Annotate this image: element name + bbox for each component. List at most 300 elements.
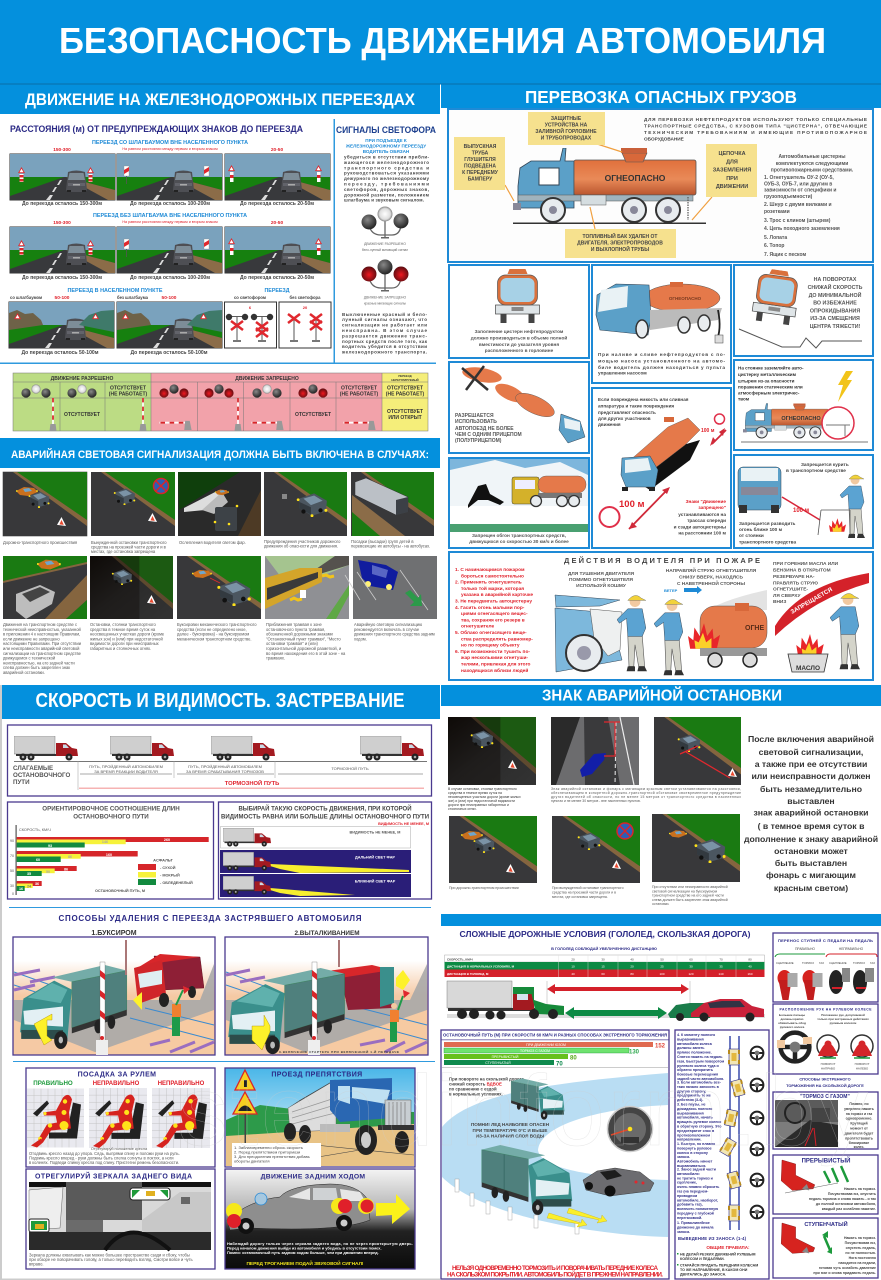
panel: warning triangle (441, 685, 881, 926)
text: fire equipment list: комплектуются следующими (776, 161, 848, 167)
panel: no smoking: огонь ближе 100 м (739, 526, 783, 532)
panel: pedal transfer: ТОРМОЗ (802, 961, 814, 965)
text: distance rule: Знак аварийной остановки и фонарь с мигающим красным светом устанавливаются на расстоянии, (551, 787, 741, 791)
table: ice distance: 20 (630, 964, 634, 968)
callout: fuel tank: ДВИГАТЕЛЯ, ЭЛЕКТРОПРОВОДОВ (577, 240, 663, 246)
hazard case: reversing: движения транспортного средства задним (354, 632, 435, 637)
distance arrows and labels: ПУТЬ, ПРОЙДЕННЫЙ АВТОМОБИЛЕМ (188, 764, 262, 769)
scene: extinguish from windward: НАПРАВЛЯЙ СТРУЮ ОГНЕТУШИТЕЛЯ (666, 566, 757, 574)
text: distance rule: пунктах и не менее 30 метров - вне населенных пунктов. (551, 799, 641, 803)
distance arrows and labels (79, 764, 424, 789)
table: ice distance: ДИСТАНЦИЯ В ГОЛОЛЕД, М (447, 972, 489, 976)
panel: passing obstacles (225, 1068, 415, 1167)
panel: 100 metre signs: аппаратура и такие повреждения (598, 404, 674, 408)
panel: tank filling: расположенного в горловине (485, 348, 554, 353)
heading: emergency braking methods (786, 1076, 864, 1088)
panel: one trailer: РАЗРЕШАЕТСЯ (455, 413, 494, 419)
signal: movement allowed: бело-лунный мигающий сигнал (362, 248, 408, 252)
panel: hand position: НАПРАВО (821, 1066, 836, 1070)
panel: hand position: РАСПОЛОЖЕНИЕ РУК НА РУЛЕВОМ КОЛЕСЕ (780, 1008, 872, 1012)
panel: seating position: Отрегулируй положение кресла (91, 1147, 148, 1151)
heading: emergency braking methods: ТОРМОЖЕНИЯ НА СКОЛЬЗКОЙ ДОРОГЕ (786, 1083, 864, 1088)
chart: stopping distance bars: - МОКРЫЙ (160, 874, 180, 878)
panel: one trailer: ЧЕМ С ОДНИМ ПРИЦЕПОМ (455, 432, 522, 438)
panel: seating position: НЕПРАВИЛЬНО (93, 1081, 140, 1087)
text: special vehicles (644, 117, 867, 142)
text: special vehicles: ДЛЯ ПЕРЕВОЗКИ НЕФТЕПРОДУКТОВ ИСПОЛЬЗУЮТ ТОЛЬКО СПЕЦИАЛЬНЫЕ (644, 117, 867, 122)
chart: braking methods: 130 (629, 1050, 640, 1056)
text: ice danger: ПОМНИ! ЛЕД НАИБОЛЕЕ ОПАСЕН (471, 1122, 550, 1127)
distances row 1: 150-300 (53, 147, 71, 153)
callout: protective devices (528, 112, 605, 145)
panel: pedal transfer (773, 933, 878, 1002)
text: driver duties: переезду, требованиями (344, 180, 429, 186)
panel: pedal transfer: ТОРМОЗ (853, 961, 865, 965)
hazard case: malfunction: если движение не запрещено (3, 636, 60, 641)
triangle case: towing (652, 814, 740, 906)
callout: exhaust: ПОДВЕДЕНА (464, 164, 496, 170)
hazard case: reversing: рекомендуется включать в случае (354, 627, 420, 632)
list: fire rules: жар несколькими огнетуши- (460, 656, 528, 661)
panel: 100 metre signs: движения (598, 422, 621, 427)
hazard case: night stop: видимости дороги при неисправных (90, 641, 159, 646)
hazard case: malfunction: настоящими Правилами. При отсутствии (3, 641, 81, 646)
panel: brake with gas: двигателя будет (845, 1131, 874, 1135)
distances row 2: 150-300 (53, 220, 71, 226)
title band: БЕЗОПАСНОСТЬ ДВИЖЕНИЯ АВТОМОБИЛЯ (59, 20, 826, 61)
panel: no smoking: от стоянки (739, 533, 764, 538)
list: fire rules: находящихся вблизи людей (461, 667, 528, 674)
text: warning triangle rule: фонарь с мигающим (766, 870, 856, 880)
panel: seating position: ПРАВИЛЬНО (33, 1080, 73, 1087)
triangle case: measured distance (654, 717, 741, 785)
panel: pedal transfer: ГАЗ (819, 961, 824, 965)
panel: visibility: БЛИЖНИЙ СВЕТ ФАР (355, 880, 396, 884)
panel: mirrors: вправо. (29, 1262, 44, 1266)
scene: extinguish from windward: ВЕТЕР (664, 588, 678, 593)
panel: difficult road conditions: В ГОЛОЛЕД СОБЛЮДАЙ УВЕЛИЧЕННУЮ ДИСТАНЦИЮ (551, 946, 657, 951)
list: fire rules (455, 567, 533, 674)
chart: stopping distance bars: 260 (164, 838, 170, 842)
panel: 100 metre signs: 100 м (619, 499, 645, 510)
panel: brake with gas: "ТОРМОЗ С ГАЗОМ" (800, 1094, 850, 1100)
distance arrows and labels: ЗА ВРЕМЯ РЕАКЦИИ ВОДИТЕЛЯ (94, 769, 158, 774)
heading: dangerous goods (441, 84, 881, 108)
chart: braking methods: 152 (655, 1044, 666, 1050)
panel: visibility: ВИДИМОСТЬ РАВНА ИЛИ БОЛЬШЕ ДЛИНЫ ОСТАНОВОЧНОГО ПУТИ (221, 814, 429, 820)
panel: passing obstacles: обороты двигателя (234, 1158, 270, 1164)
panel: hand position: рулевым колесом (830, 1021, 857, 1025)
panel: stepped braking: опустить педаль, (846, 1246, 876, 1250)
list: fire rules: 2. Применять огнетушитель (455, 580, 522, 586)
panel: intermittent braking: каждый раз ослабляя нажатие. (822, 1207, 876, 1211)
crossing signs without signals: 20 (303, 305, 308, 310)
text: skid steps: 1. Быстро, но плавно (677, 1142, 716, 1146)
scene: towing off crossing: 1.БУКСИРОМ (91, 930, 137, 937)
text: general rules: ТО ЖЕ НАПРАВЛЕНИЕ, В КАКОМ ОНИ (680, 1268, 748, 1272)
panel: 100 metre signs: Если повреждена емкость или сливная (598, 397, 689, 402)
table: signal states: ОТСУТСТВУЕТ (387, 409, 423, 415)
table: ice distance: 140 (718, 972, 724, 976)
text: warning triangle rule: выставлен (787, 796, 835, 806)
callout: grounding chain: ДЛЯ (726, 160, 738, 166)
text: fire equipment list: 1. Огнетушитель ОУ-2 (ОУ-5, (764, 175, 834, 181)
panel: skid recovery (675, 1030, 769, 1279)
text: driver duties: дорожной разметки, положением (344, 191, 430, 197)
hazard case: malfunction (3, 556, 87, 675)
text: warning triangle rule: остановки может (774, 846, 849, 856)
chart: stopping distance bars (8, 802, 214, 899)
text: turning advice: по сравнению с ездой (449, 1086, 497, 1092)
text: turning advice: в нормальных условиях. (449, 1092, 503, 1096)
triangle case: accident (449, 816, 537, 890)
scene: towing off crossing (13, 930, 215, 1055)
callout: exhaust: ГЛУШИТЕЛЯ (464, 157, 496, 163)
heading: speed and visibility: СКОРОСТЬ И ВИДИМОСТЬ. ЗАСТРЕВАНИЕ (36, 690, 404, 712)
panel: no smoking: в транспортном средстве (786, 468, 846, 473)
illustration: following distance (447, 981, 765, 1022)
panel: stepped braking: готовая чуть ослабить давление (819, 1266, 876, 1270)
callout: exhaust (454, 137, 505, 190)
panel: no smoking: 100 м (793, 508, 810, 514)
panel: brake with gas: на тормоз и газ (846, 1112, 873, 1116)
triangle case: towing: транспортном средстве на его задней части (652, 894, 724, 898)
hazard case: tram: обозначенной дорожными знаками (266, 632, 333, 637)
chart: stopping distance bars: СКОРОСТЬ, КМ/Ч (19, 828, 51, 832)
chart: stopping distance bars: 93 (48, 844, 52, 848)
scene: blanket over engine: ПОМИМО ОГНЕТУШИТЕЛЯ (569, 577, 634, 583)
chart: stopping distance bars: 16 (19, 887, 23, 891)
heading: hazard lights: АВАРИЙНАЯ СВЕТОВАЯ СИГНАЛИЗАЦИЯ ДОЛЖНА БЫТЬ ВКЛЮЧЕНА В СЛУЧАЯХ: (11, 448, 429, 461)
panel: tank filling: Заполнение цистерн нефтепродуктом (475, 328, 564, 334)
text: skid steps: таки начало заносить в (677, 1085, 720, 1089)
panel: stepped braking: Нога постоянно (849, 1256, 876, 1260)
text: skid steps: выравнивания (677, 1037, 704, 1041)
panel: loading and unloading: ОГНЕОПАСНО (669, 296, 702, 301)
chart: stopping distance bars: ОСТАНОВОЧНОГО ПУТИ (73, 814, 149, 820)
hazard case: malfunction: технической неисправностью, указанной (3, 627, 81, 632)
text: stopping path components: ПУТИ (13, 779, 30, 786)
panel: pedal transfer: ПРАВИЛЬНО (795, 947, 815, 951)
panel: tank filling (449, 265, 589, 358)
distances row 2: ПЕРЕЕЗД БЕЗ ШЛАГБАУМА ВНЕ НАСЕЛЕННОГО ПУНКТА (93, 213, 247, 219)
table: ice distance: 30 (689, 964, 693, 968)
table: signal states: ПЕРЕЕЗД (398, 374, 412, 378)
crossing signs with signals: 6 (249, 305, 252, 310)
scene: burning oil: ЗАПРЕЩАЕТСЯ (790, 587, 834, 616)
text: warning triangle rule: красным светом) (774, 883, 848, 893)
hazard case: reversing: Аварийную световую сигнализацию (354, 622, 422, 627)
panel: stepped braking: СТУПЕНЧАТЫЙ (804, 1220, 848, 1228)
callout: exhaust: БАМПЕРУ (468, 176, 493, 182)
distances row 2: На равном расстоянии между первым и вторым знаком (122, 220, 218, 224)
table: signal states: (НЕ РАБОТАЕТ) (340, 392, 379, 398)
title band (0, 0, 881, 84)
distances row 3: без шлагбаума (117, 295, 149, 300)
table: signal states: ОТСУТСТВУЕТ (295, 412, 331, 418)
text: skid steps: приводном (677, 1194, 697, 1198)
hazard case: malfunction: или неисправности аварийной световой (3, 646, 79, 651)
text: skid steps: боковые перемещения (677, 1073, 718, 1077)
panel: stepped braking: Нажать на тормоз. (844, 1236, 876, 1240)
panel: stepped braking: при юзе и снова придавить педаль. (813, 1271, 876, 1275)
panel: 100 metre signs: и сзади автоцистерны (674, 524, 726, 530)
panel: 100 metre signs: для других участников (598, 416, 651, 421)
text: fire equipment list: 3. Трос с клином (штырем) (764, 218, 831, 224)
distances row 1: На равном расстоянии между первым и вторым знаком (122, 147, 218, 151)
text: skid steps: 4. К моменту полного (677, 1033, 716, 1037)
text: driver duties: ЖЕЛЕЗНОДОРОЖНОМУ ПЕРЕЕЗДУ (345, 144, 426, 148)
table: ice distance: 40 (630, 958, 634, 962)
text: skid steps: сцепление, (677, 1181, 697, 1185)
text: skid steps: Автомобиль начнет (677, 1160, 713, 1164)
distances row 1: До переезда осталось 150-300м (22, 201, 102, 207)
heading: warning triangle (441, 685, 881, 706)
crossing signs without signals (279, 302, 331, 348)
heading: traffic signals: СИГНАЛЫ СВЕТОФОРА (336, 125, 436, 136)
panel: passing obstacles: 2. Перед препятствием притормози (234, 1150, 300, 1154)
text: broken signal: железнодорожного транспорта. (341, 350, 427, 355)
scene: burning oil: ПРАВЛЯТЬ СТРУЮ (773, 580, 818, 586)
table: signal states: ОТСУТСТВУЕТ (341, 386, 377, 392)
list: fire rules: 6. При возможности тушить по- (455, 649, 530, 655)
hazard case: malfunction: слева должен быть закреплен знак (3, 665, 70, 670)
table: ice distance: 120 (688, 972, 694, 976)
text: ice danger (471, 1122, 550, 1138)
text: driver duties: руководствоваться указаниями (344, 171, 429, 176)
distance arrows and labels: ПУТЬ, ПРОЙДЕННЫЙ АВТОМОБИЛЕМ (89, 764, 163, 769)
panel: 100 metre signs (592, 388, 731, 548)
callout: protective devices: И ТРУБОПРОВОДАХ (541, 136, 592, 142)
panel: stepped braking: но не полностью. (845, 1251, 876, 1255)
text: skid steps: действия (3-4). (677, 1098, 703, 1102)
panel: hand position: Положение рук, допускаемой (821, 1013, 865, 1017)
distances row 3: ПЕРЕЕЗД (264, 288, 290, 294)
panel: ice braking and turning: ОСТАНОВОЧНЫЙ ПУТЬ (М) ПРИ СКОРОСТИ 60 КМ/Ч И РАЗНЫХ СПОСОБАХ ЭКСТРЕННОГО ТОРМОЖЕНИЯ (443, 1032, 667, 1038)
distances row 2: До переезда осталось 150-300м (22, 275, 102, 281)
panel: hand position (773, 1004, 878, 1074)
list: fire rules: циями огнегасящего вещес- (461, 612, 528, 617)
panel: tank filling: вместимости до указателя уровня (479, 342, 559, 347)
table: ice distance: 40 (571, 972, 575, 976)
scene: burning oil (773, 561, 869, 672)
panel: loading and unloading: биле водитель должен находиться у пульта (598, 364, 725, 370)
triangle case: forced stop: местах, где остановка запрещена. (552, 895, 608, 899)
text: skid steps: колесо в сторону (677, 1151, 708, 1155)
panel: intermittent braking (773, 1155, 878, 1214)
panel: grounding: твом (738, 396, 750, 402)
hazard case: malfunction: Движения на транспортном средстве с (3, 622, 77, 627)
panel: passing obstacles: ПРОЕЗД ПРЕПЯТСТВИЯ (271, 1072, 363, 1078)
hazard case: towing: механическом транспортном средстве. (177, 636, 252, 641)
scene: pushing off crossing (225, 930, 428, 1055)
panel: pedal transfer: СЦЕПЛЕНИЕ (829, 961, 847, 965)
table: ice distance: 70 (719, 958, 723, 962)
text: warning triangle rule: дополнение к знаку аварийной (744, 834, 878, 844)
text: skid steps: Снятся нажать на педаль (677, 1055, 723, 1059)
panel: intermittent braking: до полной остановки автомобиля, (816, 1202, 876, 1206)
heading: fire actions: ДЕЙСТВИЯ ВОДИТЕЛЯ ПРИ ПОЖАРЕ (564, 556, 760, 565)
panel: slow on turns (734, 265, 873, 356)
text: skid steps: автомобиле, наоборот, (677, 1198, 718, 1202)
hazard case: malfunction: аварийной остановки. (3, 670, 45, 675)
chart: stopping distance bars: 50 (46, 870, 50, 874)
table: signal states: ОТСУТСТВУЕТ (387, 386, 423, 392)
text: skid steps: заноса. (677, 1230, 690, 1234)
hazard case: night stop: габаритных и стояночных огнях. (90, 646, 151, 651)
panel: reversing: ПЕРЕД ТРОГАНИЕМ ПОДАЙ ЗВУКОВОЙ СИГНАЛ! (246, 1259, 364, 1267)
yellow arrows (547, 1208, 607, 1227)
table: signal states (13, 373, 428, 431)
panel: ice braking and turning (441, 1030, 669, 1279)
panel: loading and unloading (592, 265, 731, 383)
panel: seating position: Отодвинь кресло назад до упора. Сядь, выпрями спину и положи руки на руль. (29, 1151, 180, 1156)
text: skid steps: автомобиля: (677, 1172, 700, 1176)
text: fire equipment list: ОУБ-3, ОУБ-7, или другим в (764, 182, 832, 188)
text: driver duties: убедиться в отсутствии прибли- (344, 154, 430, 160)
text: skid steps: передачу с глубокой (677, 1212, 714, 1216)
scene: burning oil: ЛЯ СВЕРХУ (773, 593, 801, 599)
panel: 100 metre signs: представляют опасность (598, 410, 656, 415)
scene: burning oil: ОГНЕТУШИТЕ- (773, 586, 808, 592)
text: skid steps: выравнивания (677, 1111, 704, 1115)
scene: blanket over engine: ДЛЯ ТУШЕНИЯ ДВИГАТЕЛЯ (568, 571, 635, 577)
panel: dangerous goods (441, 84, 881, 680)
list: fire rules: указана в аварийной карточке (461, 591, 533, 598)
panel: hand position: обхватывать обод (778, 1021, 806, 1025)
hazard case: tram: остановочного пункта трамвая, (266, 627, 325, 632)
distances row 3: До переезда осталось 50-100м (130, 350, 208, 356)
heading: emergency braking methods: СПОСОБЫ ЭКСТРЕННОГО (799, 1076, 851, 1082)
text: skid steps: не тратить тормоз и (677, 1176, 713, 1180)
skid cars (719, 1049, 746, 1221)
panel: seating position: ПОСАДКА ЗА РУЛЕМ (78, 1072, 156, 1078)
hazard case: towing: Буксировки механического транспортного (177, 622, 257, 627)
chart: braking methods: ТОРМОЗ С ГАЗОМ (520, 1049, 550, 1053)
table: ice distance: 60 (689, 958, 693, 962)
panel: no smoking (734, 455, 873, 548)
heading: hazard lights (0, 438, 440, 468)
heading: railway crossings (0, 84, 440, 114)
panel: hazard lights (0, 438, 440, 675)
panel: brake with gas (773, 1092, 878, 1149)
panel: loading and unloading: При наливе и сливе нефтепродуктов с по- (598, 351, 725, 357)
panel: one trailer: АВТОПОЕЗД НЕ БОЛЕЕ (455, 426, 514, 432)
scene: burning oil: БЕНЗИНА В ОТКРЫТОМ (773, 568, 831, 574)
panel: reversing (225, 1169, 415, 1269)
heading: speed and visibility (0, 685, 440, 719)
panel: brake with gas: уверенно нажать (844, 1107, 874, 1111)
text: fire equipment list: 6. Топор (764, 243, 784, 249)
triangle case: night: дороги при неисправных габаритных и (448, 803, 509, 807)
signal: movement prohibited: ДВИЖЕНИЕ ЗАПРЕЩЕНО (364, 296, 406, 300)
text: skid steps: прямое положение. (677, 1051, 712, 1055)
hazard case: malfunction: движущемся с технической (3, 656, 55, 661)
panel: grounding: На стоянке заземляйте авто- (738, 364, 804, 370)
heading: difficult conditions: СЛОЖНЫЕ ДОРОЖНЫЕ УСЛОВИЯ (ГОЛОЛЕД, СКОЛЬЗКАЯ ДОРОГА) (460, 930, 751, 939)
text: skid steps: заноса. (677, 1155, 690, 1159)
panel: brake with gas: блокировке (849, 1141, 869, 1145)
table: ice distance: 25 (660, 964, 664, 968)
text: fire equipment list: зависимости от специфики и (764, 186, 836, 194)
heading: dangerous goods: ПЕРЕВОЗКА ОПАСНЫХ ГРУЗОВ (525, 87, 797, 107)
hazard case: malfunction: сигнализации на транспортном средстве (3, 651, 82, 656)
text: driver duties: ПРИ ПОДЪЕЗДЕ К (365, 138, 407, 143)
scene: extinguish from windward: СНИЗУ ВВЕРХ, НАХОДЯСЬ (679, 574, 744, 580)
panel: intermittent braking: ПРЕРЫВИСТЫЙ (802, 1156, 850, 1164)
text: broken signal: портных средств после того, как (342, 339, 428, 344)
triangle case: night: зон) и (или) при недостаточной видимости (448, 799, 515, 803)
distances row 1: До переезда осталось 20-50м (240, 201, 314, 207)
hazard case: tram: горизонтальной дорожной разметкой, и (266, 646, 341, 651)
chart: stopping distance bars: 24 (27, 884, 32, 888)
panel: 100 metre signs: устанавливаются на (678, 512, 726, 517)
text: distance rule: других водителей об опасности, но не менее 15 метров от транспортного средства в населенных (551, 795, 741, 799)
table: signal states: ОТСУТСТВУЕТ (64, 412, 100, 418)
text: warning triangle rule: знак аварийной остановки (753, 808, 869, 818)
triangle case: night: стояночных огнях. (448, 807, 477, 811)
steering wheels (751, 1047, 763, 1218)
callout: exhaust: ТРУБА (472, 150, 489, 156)
chart: stopping distance bars: ОРИЕНТИРОВОЧНОЕ СООТНОШЕНИЕ ДЛИН (42, 806, 180, 812)
panel: one trailer (449, 362, 589, 453)
list: fire rules: тва, сохраняя его резерв в (461, 618, 525, 623)
chart: stopping distance bars: 60 (36, 858, 40, 862)
text: skid steps: автомобиля колеса (677, 1042, 713, 1046)
hazard case: night stop: неосвещенных участках дороги (кроме (90, 632, 165, 637)
triangle case: towing: световой сигнализации на буксируемом (652, 889, 718, 893)
panel: hand position: Большие пальцы (779, 1013, 806, 1017)
panel: one trailer: ИСПОЛЬЗОВАТЬ (455, 419, 497, 425)
panel: grounding: поражения статическим или (738, 384, 803, 390)
panel: stopping distance (8, 725, 432, 796)
distances row 3: 50-100 (55, 295, 70, 301)
text: skid steps: выравниваться. (677, 1164, 706, 1168)
chart: stopping distance bars: ОСТАНОВОЧНЫЙ ПУТЬ, М (95, 889, 145, 893)
table: ice distance: 160 (747, 972, 753, 976)
callout: exhaust: ВЫПУСКНАЯ (464, 144, 497, 150)
hazard case: danger warning: Предупреждения участников дорожного (264, 539, 341, 544)
signal: movement prohibited (362, 260, 408, 306)
panel: reversing: Помни: остановочный путь задним ходом больше, чем при движении вперед. (227, 1250, 379, 1255)
panel: grounding (734, 360, 873, 450)
panel: intermittent braking: Почувствовав юз, опустить (828, 1192, 876, 1196)
list: fire rules: только той марки, которая (461, 585, 524, 592)
distances row 3: ПЕРЕЕЗД В НАСЕЛЕННОМ ПУНКТЕ (68, 288, 163, 294)
chart: braking methods: 70 (556, 1062, 563, 1068)
triangle case: night: неосвещенных участках дороги (кроме жилых (448, 795, 521, 799)
hazard case: forced stop: местах, где остановка запрещена (91, 549, 156, 554)
hazard case: towing: средства (если не определено иное, (177, 627, 247, 632)
panel: grounding: ОГНЕОПАСНО (781, 416, 821, 422)
chart: stopping distance bars: 35 (27, 872, 31, 876)
text: skid steps: 1. Прямолинейное (677, 1221, 710, 1225)
text: skid steps: газ (на переднем- (677, 1190, 709, 1194)
text: stopping path components: СЛАГАЕМЫЕ (13, 765, 53, 772)
text: special vehicles: ТРАНСПОРТНЫЕ СРЕДСТВА, С КУЗОВОМ ТИПА "ЦИСТЕРНА", ОТВЕЧАЮЩИЕ (644, 124, 867, 128)
car: sports car (583, 1168, 654, 1196)
truck: on ice small (511, 1078, 564, 1120)
text: warning triangle rule: быть незамедлительно (760, 784, 862, 794)
hazard case: night stop: жилых зон) и (или) при недостаточной (90, 636, 163, 641)
text: skid steps (677, 1033, 724, 1234)
chart: stopping distance bars: 86 (68, 855, 72, 859)
panel: reversing: Наблюдай дорогу только через зеркала заднего вида, но не через приоткрытую дверь. (227, 1241, 413, 1246)
text: skid steps: в обратную сторону. Это (677, 1124, 722, 1128)
chart: braking methods: СТУПЕНЧАТЫЙ (485, 1061, 511, 1065)
text: fire equipment list: 2. Шнур с двумя вилками и (764, 202, 832, 208)
distances row 3 (8, 288, 321, 356)
